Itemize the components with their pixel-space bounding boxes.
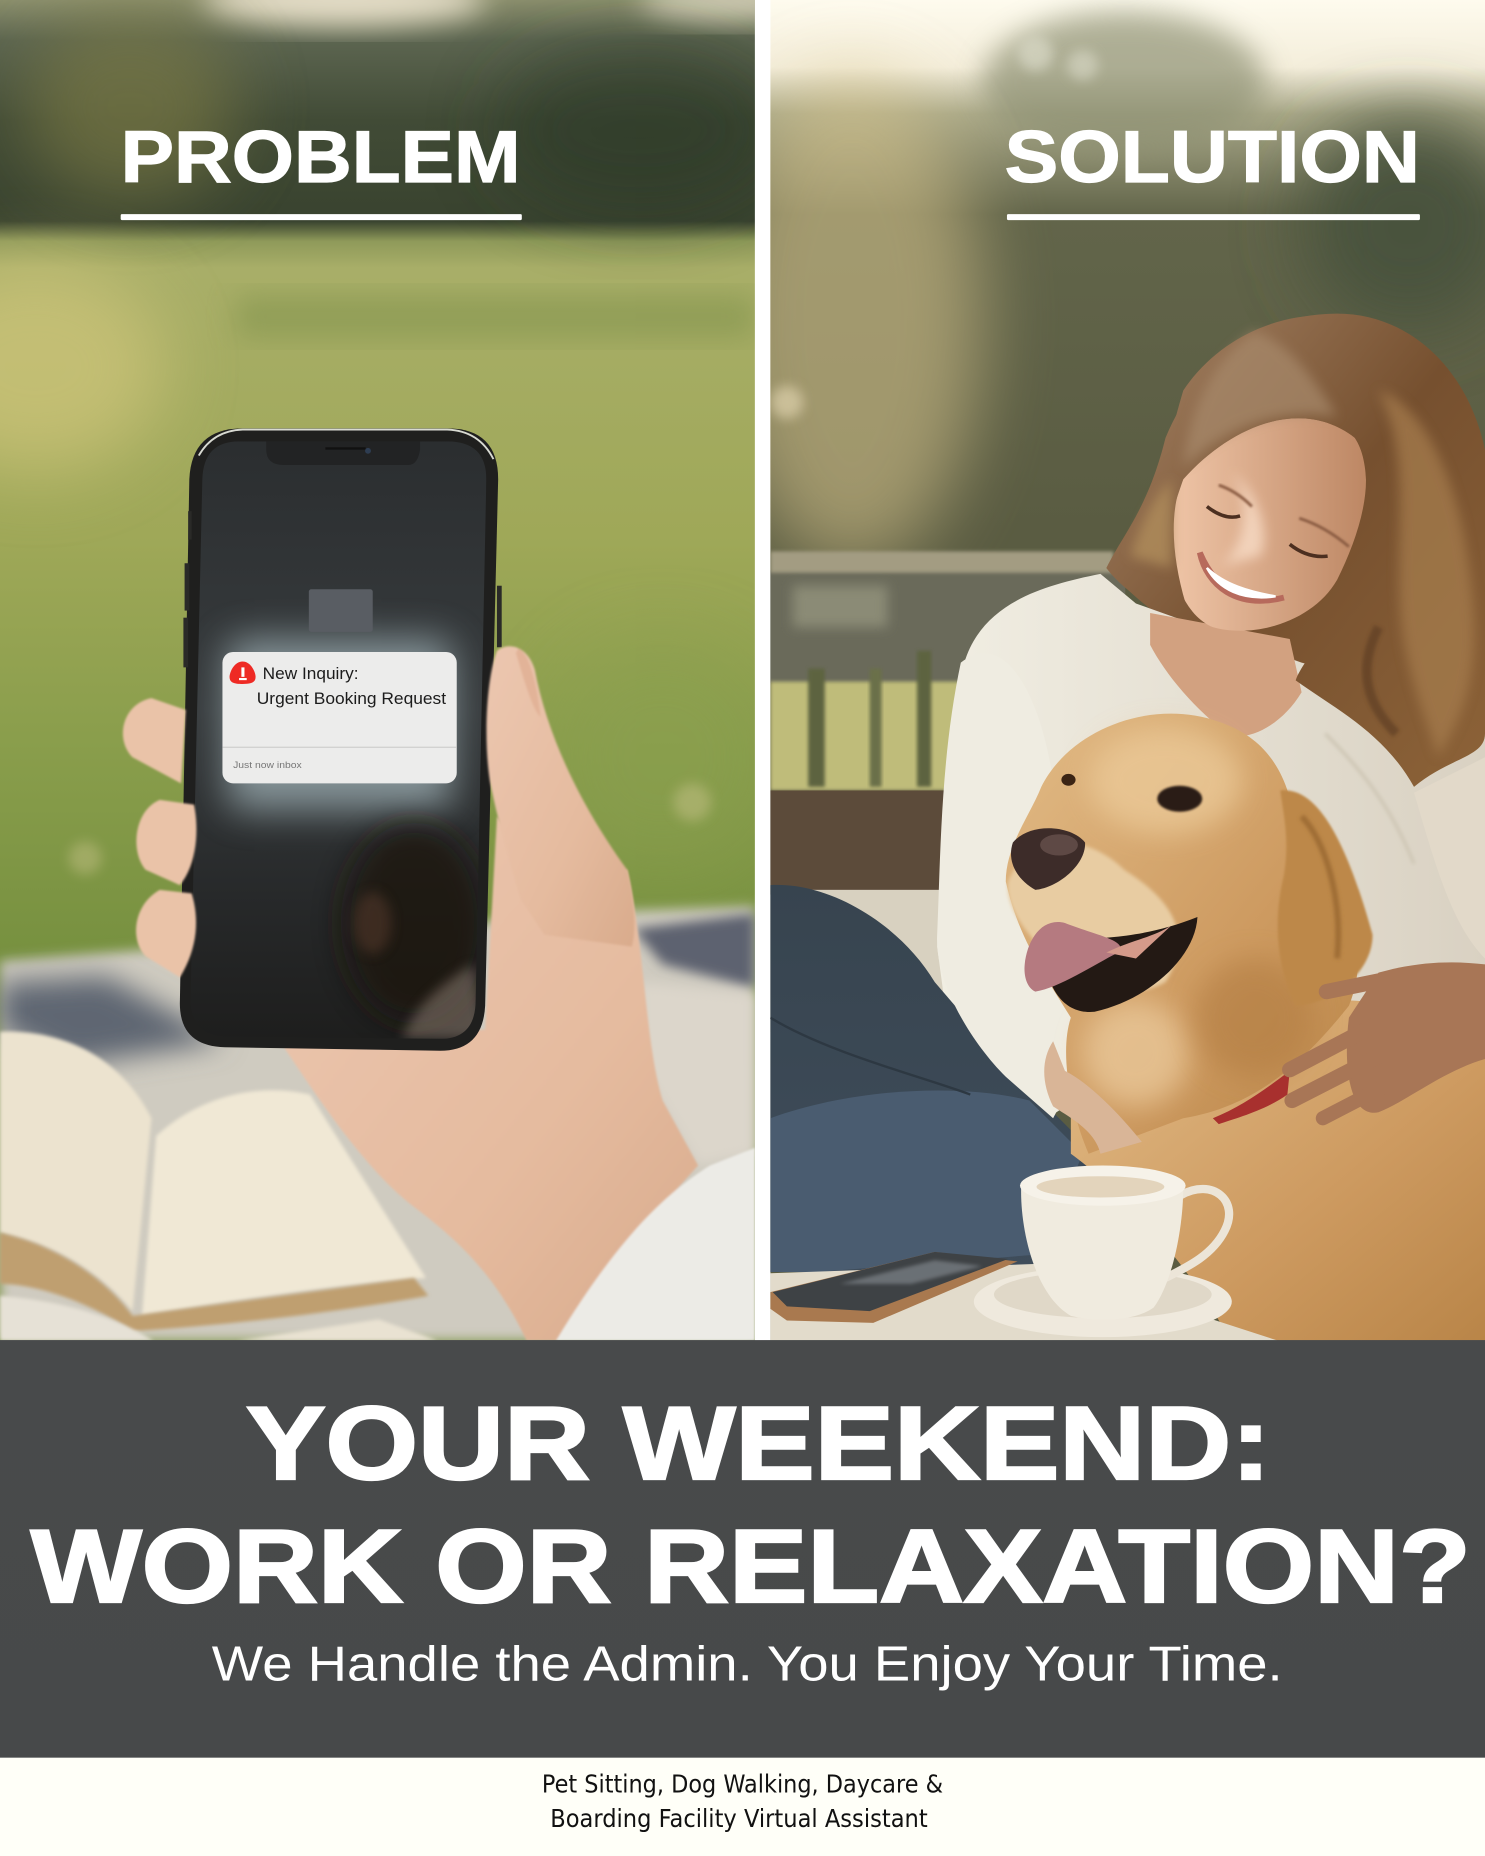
phone screen	[193, 442, 486, 1039]
headline: WORK OR RELAXATION?	[31, 1509, 1471, 1625]
footer text: Boarding Facility Virtual Assistant	[550, 1804, 928, 1833]
footer text	[542, 1770, 943, 1833]
fingers over phone	[123, 646, 634, 977]
woman: hair back	[1128, 316, 1366, 664]
dog eyes	[1157, 786, 1202, 812]
icon: red alert	[230, 661, 256, 684]
dog body	[1071, 999, 1485, 1341]
woman: hands on dog	[1044, 962, 1485, 1154]
notification text: New Inquiry:	[263, 664, 359, 683]
headline	[31, 1386, 1471, 1625]
background: park lawn and trees	[0, 0, 805, 1341]
heading: problem: PROBLEM	[121, 116, 521, 198]
headline band	[0, 1340, 1485, 1758]
jeans	[770, 885, 1100, 1272]
woman: white shirt	[937, 574, 1485, 1118]
smartphone on table	[770, 1252, 1018, 1323]
dog muzzle	[1008, 842, 1179, 991]
footer	[0, 1758, 1485, 1856]
notification text: Just now inbox	[233, 760, 302, 771]
notification text	[233, 664, 447, 771]
dog ear	[1278, 790, 1373, 1006]
woman: sleeve	[937, 659, 1056, 1118]
background: trees, railing, lawn	[722, 0, 1485, 1341]
panel: solution photo	[722, 0, 1485, 1341]
footer text: Pet Sitting, Dog Walking, Daycare &	[542, 1770, 943, 1799]
panel: problem photo	[0, 0, 805, 1341]
phone	[177, 428, 502, 1051]
heading: solution: SOLUTION	[1005, 116, 1420, 198]
notification text: Urgent Booking Request	[257, 689, 447, 708]
phone body	[180, 428, 498, 1051]
dog head	[1006, 714, 1358, 1154]
dog mouth	[1041, 917, 1197, 1012]
hand behind phone	[284, 816, 755, 1341]
dog collar	[1213, 1071, 1290, 1124]
blanket and open book	[0, 906, 755, 1341]
woman: neck and face	[1150, 418, 1366, 736]
coffee cup and saucer	[974, 1166, 1232, 1337]
table	[770, 1264, 1278, 1341]
notification card	[222, 652, 457, 783]
subheading: We Handle the Admin. You Enjoy Your Time.	[212, 1637, 1283, 1691]
golden retriever	[1006, 714, 1485, 1341]
dog nose	[1011, 828, 1085, 890]
headline: YOUR WEEKEND:	[246, 1386, 1271, 1502]
woman: front hair	[1106, 314, 1485, 787]
